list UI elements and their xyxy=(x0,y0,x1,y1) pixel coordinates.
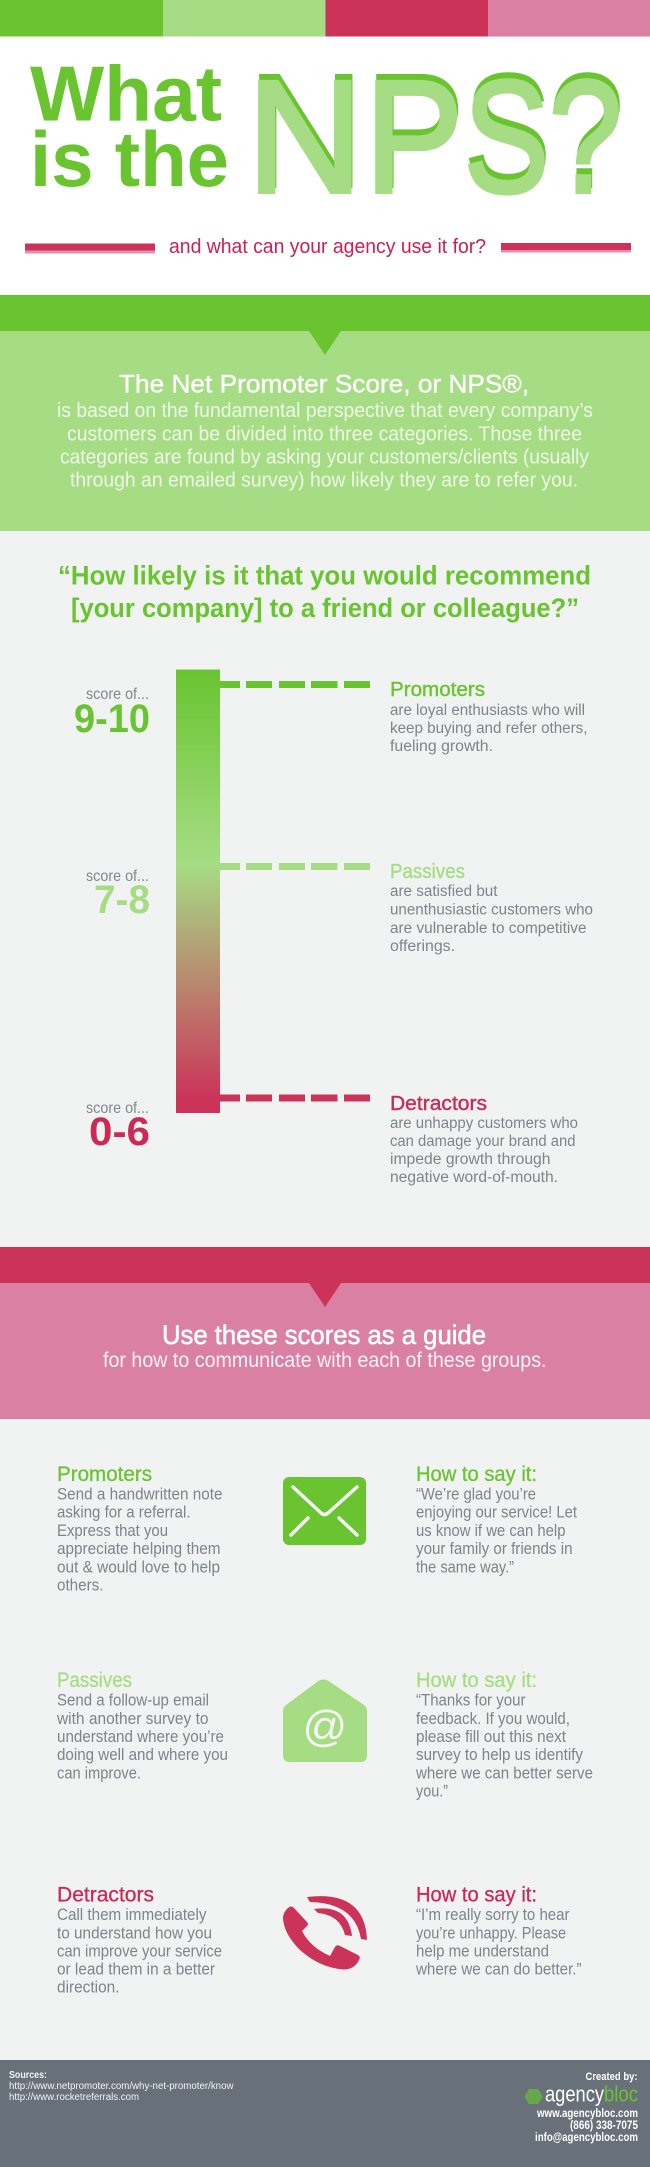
detractors advice: can improve your service xyxy=(57,1943,222,1961)
row: detractors xyxy=(57,1884,582,1997)
definition: promoters xyxy=(390,679,588,755)
passives advice: doing well and where you xyxy=(57,1746,228,1764)
passives advice xyxy=(56,1669,228,1782)
passives advice: with another survey to xyxy=(56,1710,209,1728)
title: NPS? shadow: S xyxy=(465,41,550,220)
guide heading: Use these scores as a guide xyxy=(162,1320,486,1350)
icon: at-sign house: @ xyxy=(302,1702,347,1751)
panel: footer xyxy=(0,2060,650,2167)
detractors advice xyxy=(57,1884,222,1997)
title: NPS? xyxy=(247,47,622,226)
definition: detractors: Detractors xyxy=(390,1093,487,1115)
intro paragraph: categories are found by asking your customers/clients (usually xyxy=(60,446,590,468)
detractors advice: to understand how you xyxy=(57,1924,212,1942)
definition: detractors xyxy=(390,1093,578,1186)
promoters advice: appreciate helping them xyxy=(57,1540,220,1558)
top colour strip xyxy=(0,0,650,36)
score: 9-10: score of... xyxy=(86,686,149,703)
title: What is the: What xyxy=(30,50,222,138)
icon: envelope xyxy=(283,1477,366,1545)
logo: agencybloc xyxy=(524,2082,638,2107)
intro heading: The Net Promoter Score, or NPS®, xyxy=(119,370,529,398)
passives script: please fill out this next xyxy=(416,1728,566,1746)
title xyxy=(30,41,623,226)
score: 9-10: 9-10 xyxy=(74,697,150,741)
dashes: detractors xyxy=(220,1094,370,1102)
survey question: “How likely is it that you would recommend xyxy=(58,560,591,590)
definition: passives: unenthusiastic customers who xyxy=(390,902,593,918)
passives advice: Passives xyxy=(57,1669,132,1692)
promoters advice: out & would love to help xyxy=(57,1558,220,1576)
passives script xyxy=(415,1669,593,1801)
credit xyxy=(524,2071,639,2144)
gradient bar xyxy=(176,670,220,1113)
promoters advice: Send a handwritten note xyxy=(57,1485,222,1503)
promoters advice: others. xyxy=(57,1577,104,1595)
icon: telephone xyxy=(283,1896,367,1970)
definition: detractors: negative word-of-mouth. xyxy=(390,1169,558,1186)
promoters script: How to say it: xyxy=(416,1463,537,1486)
detractors script: where we can do better.” xyxy=(415,1961,582,1979)
score: 0-6: 0-6 xyxy=(89,1110,150,1154)
passives script: “Thanks for your xyxy=(416,1692,526,1710)
intro paragraph: is based on the fundamental perspective that every company’s xyxy=(57,399,593,422)
definition: detractors: are unhappy customers who xyxy=(390,1115,578,1132)
definition: passives: offerings. xyxy=(390,938,455,955)
title: NPS? shadow: ? xyxy=(550,41,623,220)
promoters script: us know if we can help xyxy=(416,1522,566,1540)
sources: http://www.netpromoter.com/why-net-promoter/know xyxy=(9,2081,234,2092)
title: NPS?: S xyxy=(464,47,549,226)
survey question: [your company] to a friend or colleague?” xyxy=(71,593,579,623)
promoters script: “We’re glad you’re xyxy=(416,1485,536,1503)
arrow: intro pointer xyxy=(309,331,341,355)
detractors advice: direction. xyxy=(57,1979,120,1997)
passives script: you.” xyxy=(416,1783,448,1801)
sources: Sources: xyxy=(9,2069,47,2081)
definition: detractors: impede growth through xyxy=(390,1151,550,1168)
title: NPS?: P xyxy=(365,47,463,226)
title: NPS?: N xyxy=(247,47,362,226)
dashes: promoters xyxy=(220,681,370,688)
detractors script: you’re unhappy. Please xyxy=(416,1924,566,1942)
definition: promoters: are loyal enthusiasts who will xyxy=(390,702,585,719)
chart: NPS score scale xyxy=(74,670,593,1186)
intro paragraph xyxy=(57,399,593,492)
icon: at-sign house xyxy=(283,1680,367,1762)
detractors script: help me understand xyxy=(416,1943,549,1961)
row: promoters xyxy=(57,1463,577,1595)
dashes: passives xyxy=(220,863,370,870)
definition: promoters: Promoters xyxy=(390,679,485,701)
detractors advice: or lead them in a better xyxy=(57,1961,215,1979)
panel: guide banner xyxy=(0,1247,650,1419)
definition: detractors: can damage your brand and xyxy=(390,1133,576,1150)
score: 0-6: score of... xyxy=(86,1100,149,1117)
arrow: guide pointer xyxy=(309,1283,341,1307)
detractors advice: Detractors xyxy=(57,1884,154,1907)
sources: http://www.rocketreferrals.com xyxy=(9,2092,139,2103)
title: What is the xyxy=(30,50,229,203)
credit: Created by: xyxy=(586,2071,638,2083)
logo: agencybloc: agency xyxy=(545,2082,604,2107)
score: 7-8 xyxy=(86,868,150,922)
title: NPS? shadow xyxy=(248,41,623,220)
definition: passives: Passives xyxy=(390,861,465,883)
definition: passives: are satisfied but xyxy=(390,883,498,900)
panel: NPS intro xyxy=(0,295,650,531)
row: passives xyxy=(56,1669,593,1801)
subtitle with side bars xyxy=(25,236,631,258)
score: 7-8: score of... xyxy=(86,868,149,885)
title: What is the: is the xyxy=(30,115,229,203)
title: NPS?: ? xyxy=(549,47,622,226)
passives script: feedback. If you would, xyxy=(416,1710,570,1728)
logo: agencybloc: bloc xyxy=(604,2082,638,2107)
intro paragraph: through an emailed survey) how likely they are to refer you. xyxy=(70,468,578,492)
promoters script: your family or friends in xyxy=(416,1540,572,1558)
survey question xyxy=(58,560,591,623)
promoters script xyxy=(416,1463,577,1576)
title: NPS? shadow: N xyxy=(248,41,364,220)
intro paragraph: customers can be divided into three categories. Those three xyxy=(67,422,582,446)
definition: passives: are vulnerable to competitive xyxy=(390,920,586,937)
sources xyxy=(9,2069,234,2103)
detractors script: “I’m really sorry to hear xyxy=(416,1906,570,1924)
score: 7-8: 7-8 xyxy=(94,878,150,922)
promoters advice: asking for a referral. xyxy=(57,1504,190,1522)
credit: (866) 338-7075 xyxy=(570,2120,639,2132)
passives script: How to say it: xyxy=(416,1669,537,1692)
promoters advice: Express that you xyxy=(57,1522,168,1540)
detractors script xyxy=(415,1884,582,1979)
passives script: where we can better serve xyxy=(415,1764,593,1782)
promoters advice xyxy=(57,1463,222,1595)
subtitle text: and what can your agency use it for? xyxy=(169,236,486,258)
passives script: survey to help us identify xyxy=(416,1746,584,1764)
passives advice: understand where you’re xyxy=(57,1728,224,1746)
promoters script: the same way.” xyxy=(416,1558,514,1576)
title: NPS? shadow: P xyxy=(366,41,464,220)
definition: passives xyxy=(390,861,593,955)
detractors advice: Call them immediately xyxy=(57,1906,207,1924)
promoters advice: Promoters xyxy=(57,1463,152,1486)
definition: promoters: fueling growth. xyxy=(390,738,493,755)
definition: promoters: keep buying and refer others, xyxy=(390,720,588,737)
detractors script: How to say it: xyxy=(416,1884,537,1907)
guide subheading: for how to communicate with each of these groups. xyxy=(103,1349,546,1372)
promoters script: enjoying our service! Let xyxy=(416,1504,577,1522)
passives advice: Send a follow-up email xyxy=(57,1692,209,1710)
passives advice: can improve. xyxy=(57,1764,141,1782)
